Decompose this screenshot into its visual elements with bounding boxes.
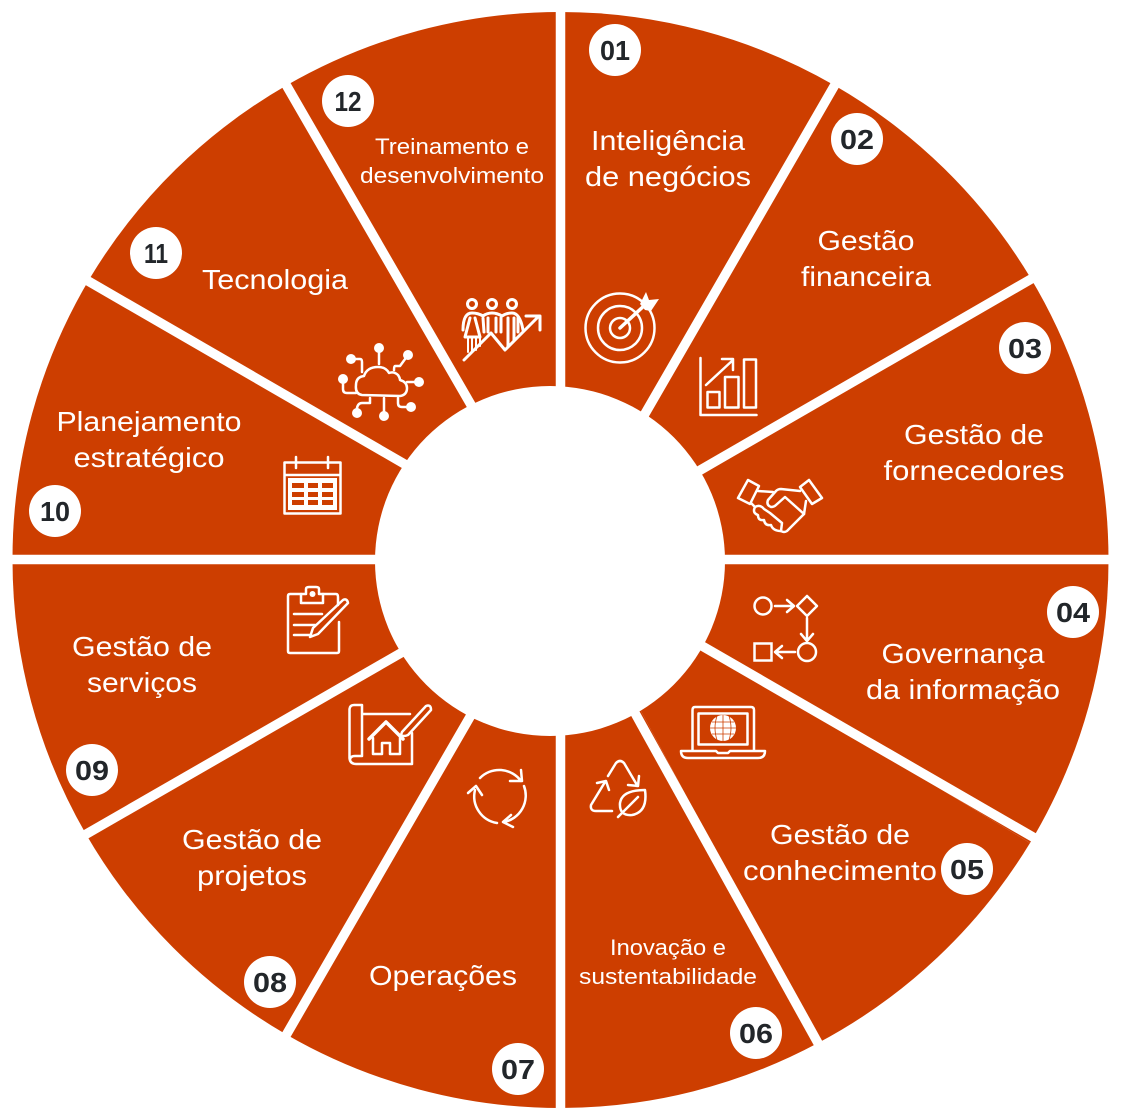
label 05 [743, 819, 937, 886]
panel 04: Governança da informação [560, 560, 1109, 843]
label 09 [72, 631, 212, 698]
badge 07 [492, 1043, 544, 1095]
label 11: Tecnologia [202, 264, 348, 295]
badge 01 [589, 24, 641, 76]
panel 07: Operações [286, 560, 560, 1108]
label 08 [182, 824, 322, 891]
badge 12: 12 [334, 86, 362, 117]
badge 12 [322, 75, 374, 127]
label 04 [866, 638, 1060, 705]
badge 10 [29, 485, 81, 537]
icon: recycling with leaf [591, 761, 645, 817]
panel 09: Gestão de serviços [12, 560, 560, 834]
label 06: sustentabilidade [579, 964, 757, 989]
icon: handshake [738, 480, 822, 532]
panel 10: Planejamento estratégico [12, 278, 560, 560]
icon: clipboard with pencil [288, 587, 348, 653]
badge 04 [1047, 586, 1099, 638]
panel 06: Inovação e sustentabilidade [560, 560, 818, 1108]
badge 11: 11 [144, 238, 168, 269]
badge 11 [130, 227, 182, 279]
label 07: Operações [369, 960, 517, 991]
panel 08: Gestão de projetos [86, 560, 561, 1035]
panel 02: Gestão financeira [560, 85, 1030, 560]
label 05: conhecimento [743, 855, 937, 886]
icon: cycle arrows [468, 770, 526, 827]
badge 07: 07 [501, 1054, 535, 1085]
label 12: Treinamento e [375, 134, 529, 159]
badge 05: 05 [950, 854, 984, 885]
label 10: Planejamento [56, 406, 242, 437]
icon: cloud network [338, 343, 424, 421]
badge 08 [244, 956, 296, 1008]
label 03: fornecedores [884, 455, 1064, 486]
label 03 [884, 419, 1064, 486]
label 02: financeira [801, 261, 931, 292]
label 09: serviços [87, 667, 197, 698]
label 02: Gestão [818, 225, 914, 256]
label 01: Inteligência [591, 125, 745, 156]
badge 03 [999, 322, 1051, 374]
label 12: desenvolvimento [360, 163, 544, 188]
label 08: Gestão de [182, 824, 322, 855]
label 09: Gestão de [72, 631, 212, 662]
badge 04: 04 [1056, 597, 1090, 628]
badge 09 [66, 744, 118, 796]
icon: calendar [284, 457, 340, 514]
badge 03: 03 [1008, 333, 1042, 364]
label 06 [579, 935, 757, 989]
label 12 [360, 134, 544, 188]
icon: team with rising arrow [463, 300, 540, 360]
label 01: de negócios [585, 161, 751, 192]
label 06: Inovação e [610, 935, 726, 960]
badge 05 [941, 843, 993, 895]
badge 09: 09 [75, 755, 109, 786]
panel 01: Inteligência de negócios [560, 12, 834, 560]
label 05: Gestão de [770, 819, 910, 850]
badge 01: 01 [600, 35, 630, 66]
badge 06 [730, 1007, 782, 1059]
icon: blueprint with house [350, 705, 431, 764]
label 03: Gestão de [904, 419, 1044, 450]
badge 08: 08 [253, 967, 287, 998]
label 08: projetos [197, 860, 307, 891]
badge 06: 06 [739, 1018, 773, 1049]
panel 05: Gestão de conhecimento [560, 560, 1030, 1043]
panel 11: Tecnologia [90, 85, 560, 560]
label 01 [585, 125, 751, 192]
icon: bar chart with arrow [700, 358, 756, 415]
label 02 [801, 225, 931, 292]
icon: process flow [754, 596, 817, 661]
panel 03: Gestão de fornecedores [560, 277, 1109, 560]
badge 02: 02 [840, 124, 874, 155]
badge 02 [831, 113, 883, 165]
label 04: da informação [866, 674, 1060, 705]
icon: laptop with globe [681, 707, 765, 758]
icon: target [586, 292, 659, 362]
badge 10: 10 [40, 496, 70, 527]
panel 12: Treinamento e desenvolvimento [286, 12, 560, 560]
center circle [375, 386, 725, 736]
label 10 [56, 406, 242, 473]
label 04: Governança [882, 638, 1045, 669]
label 10: estratégico [74, 442, 224, 473]
